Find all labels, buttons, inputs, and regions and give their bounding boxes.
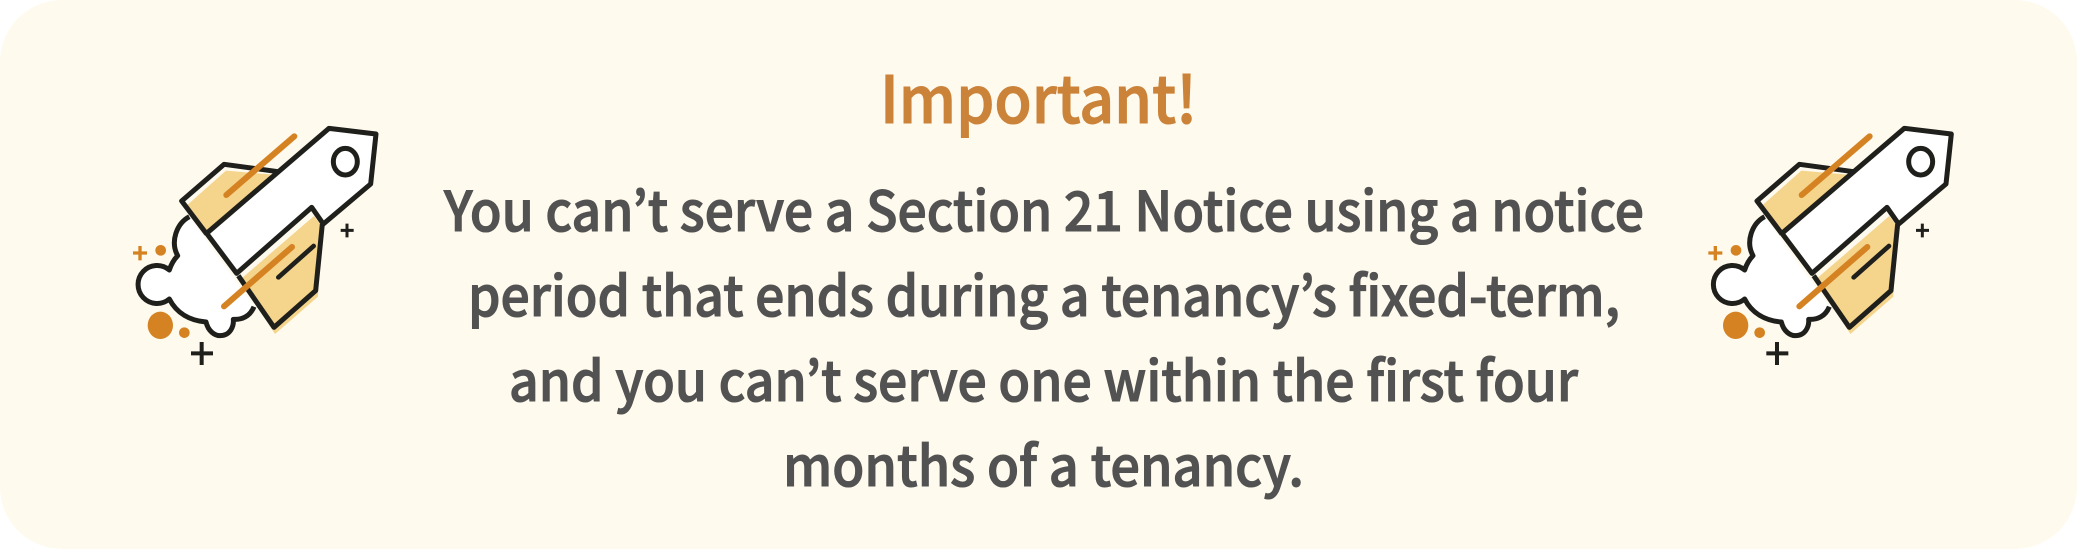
icon: rocket left: [133, 128, 376, 365]
icon: rocket right: [1708, 128, 1951, 365]
body text: period that ends during a tenancy’s fixed-term,: [468, 252, 1620, 332]
body text: You can’t serve a Section 21 Notice using a notice: [443, 167, 1644, 247]
heading: Important!: [880, 48, 1197, 142]
body text: months of a tenancy.: [783, 422, 1304, 502]
body text: and you can’t serve one within the first four: [509, 337, 1578, 417]
body text: [443, 167, 1644, 502]
